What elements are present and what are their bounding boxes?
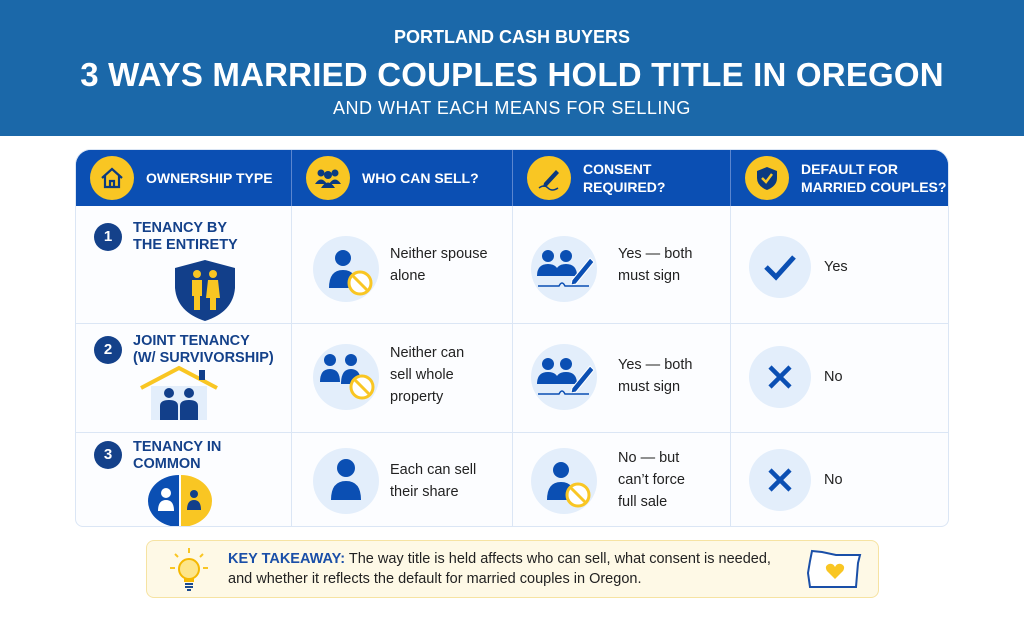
who can sell [313, 448, 379, 514]
row 2 label [94, 336, 122, 364]
row 1: tenancy by the entirety: alone [390, 268, 425, 284]
title: 3 WAYS MARRIED COUPLES HOLD TITLE IN OREGON [80, 56, 944, 93]
row 2: joint tenancy: JOINT TENANCY [133, 333, 250, 349]
row 2 label: 2 [104, 341, 112, 358]
icon: house couple [140, 366, 218, 420]
row 3: tenancy in common: can’t force [618, 472, 685, 488]
who can sell [313, 344, 379, 410]
consent [531, 344, 597, 410]
takeaway text: KEY TAKEAWAY: The way title is held affects who can sell, what consent is needed, [228, 551, 771, 567]
row 3: tenancy in common: COMMON [133, 456, 201, 472]
row 3 label [94, 441, 122, 469]
table header [76, 150, 950, 206]
row 1 label [94, 223, 122, 251]
row 2: joint tenancy: (W/ SURVIVORSHIP) [133, 350, 274, 366]
table header: MARRIED COUPLES? [801, 179, 946, 195]
row 1: tenancy by the entirety: TENANCY BY [133, 220, 227, 236]
default: no [749, 346, 811, 408]
default: no [749, 449, 811, 511]
icon: oregon heart [807, 550, 862, 588]
icon: split circle [148, 475, 212, 526]
row 3: tenancy in common: TENANCY IN [133, 439, 221, 455]
row 1: tenancy by the entirety: THE ENTIRETY [133, 237, 238, 253]
row 1 label: 1 [104, 228, 112, 245]
table header: WHO CAN SELL? [362, 170, 479, 186]
row 1: tenancy by the entirety: must sign [618, 268, 680, 284]
table header: OWNERSHIP TYPE [146, 170, 273, 186]
table header: DEFAULT FOR [801, 161, 898, 177]
row 3: tenancy in common: full sale [618, 494, 667, 510]
table header: CONSENT [583, 161, 651, 177]
icon: shield couple [175, 260, 235, 321]
takeaway text: and whether it reflects the default for married couples in Oregon. [228, 571, 641, 587]
grid lines [76, 323, 950, 324]
row 2: joint tenancy: sell whole [390, 367, 454, 383]
row 2: joint tenancy: No [824, 369, 843, 385]
row 1: tenancy by the entirety [94, 220, 848, 321]
row 2: joint tenancy [94, 333, 843, 420]
row 2: joint tenancy: Neither can [390, 345, 464, 361]
key takeaway callout [146, 540, 879, 598]
row 3 label: 3 [104, 446, 112, 463]
row 2: joint tenancy: Yes — both [618, 357, 692, 373]
row 1: tenancy by the entirety: Yes — both [618, 246, 692, 262]
row 1: tenancy by the entirety: Yes [824, 259, 848, 275]
consent [531, 448, 597, 514]
default: yes [749, 236, 811, 298]
table header: REQUIRED? [583, 179, 665, 195]
header banner [0, 0, 1024, 136]
who can sell [313, 236, 379, 302]
row 3: tenancy in common: No — but [618, 450, 679, 466]
row 2: joint tenancy: property [390, 389, 443, 405]
row 3: tenancy in common: Each can sell [390, 462, 476, 478]
brand: PORTLAND CASH BUYERS [394, 27, 630, 47]
consent [531, 236, 597, 302]
subtitle: AND WHAT EACH MEANS FOR SELLING [333, 98, 691, 118]
row 3: tenancy in common [94, 439, 843, 526]
row 3: tenancy in common: their share [390, 484, 459, 500]
row 1: tenancy by the entirety: Neither spouse [390, 246, 488, 262]
row 2: joint tenancy: must sign [618, 379, 680, 395]
row 3: tenancy in common: No [824, 472, 843, 488]
takeaway text [228, 551, 771, 587]
table [75, 149, 949, 527]
icon: light bulb [170, 548, 208, 591]
